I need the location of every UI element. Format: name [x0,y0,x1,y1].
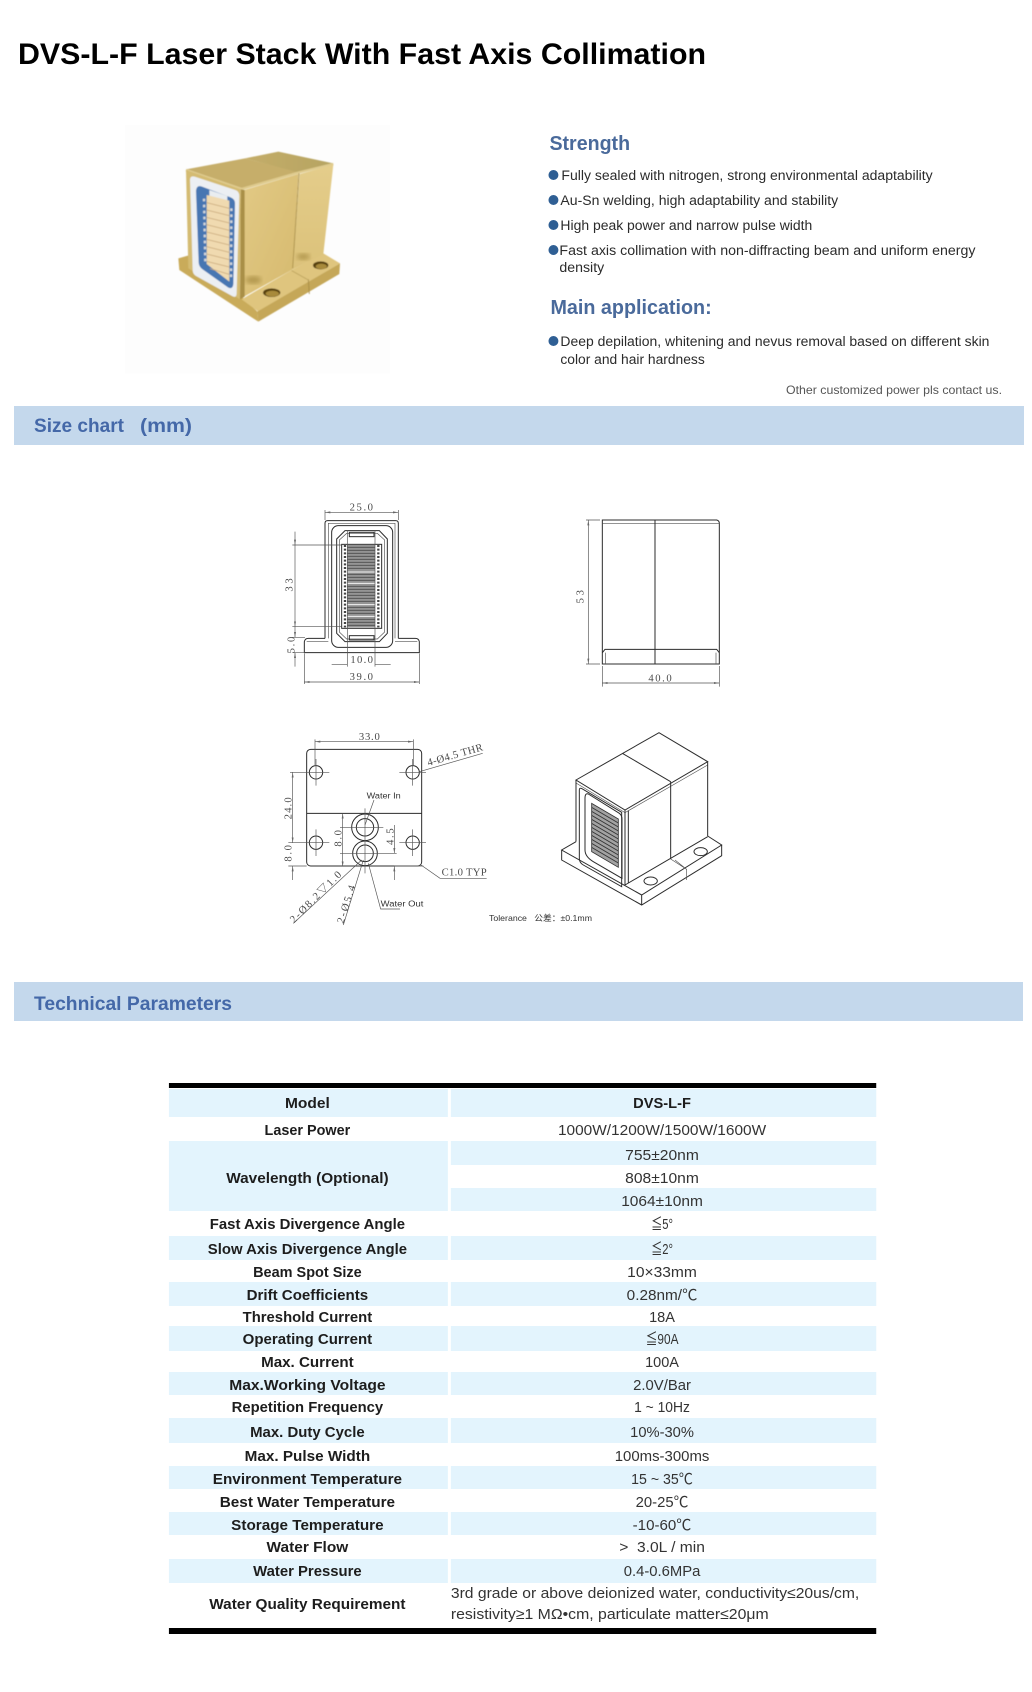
row: drift: Drift Coefficients [247,1287,368,1304]
row: water temperature: 20-25℃ [636,1494,688,1511]
row: water quality [209,1585,859,1623]
row: duty cycle [250,1424,694,1441]
row: water quality: 3rd grade or above deionized water, conductivity≤20us/cm, [451,1585,859,1602]
heading: main application: Main application: [550,297,712,319]
banner: size chart: Size chart [34,416,125,437]
panel: main application [548,297,989,367]
row: fast axis [210,1216,673,1233]
row: duty cycle: 10%-30% [630,1424,694,1441]
bullet list: strengths: Fully sealed with nitrogen, strong environmental adaptability [561,167,933,183]
row: slow axis [208,1241,673,1258]
row: wavelength: Wavelength (Optional) [226,1170,389,1187]
row: max current: 100A [645,1354,679,1371]
bullet list: strengths: Au-Sn welding, high adaptability and stability [560,192,838,208]
row: laser power: Laser Power [265,1122,350,1139]
row: laser power [265,1122,767,1139]
row: working voltage: Max.Working Voltage [229,1377,386,1394]
row: water flow: Water Flow [267,1539,349,1556]
dimension and water labels: Water Out [381,900,424,909]
bullet list: strengths: Fast axis collimation with non-diffracting beam and uniform energy [559,242,976,258]
chart: bottom view dimension drawing [284,732,487,925]
row: max current: Max. Current [261,1354,354,1371]
banner: size chart [14,406,1024,445]
dimension labels: 5.0 [287,637,298,653]
bullet: application text: Deep depilation, whitening and nevus removal based on different skin [560,333,989,349]
note: tolerance: Tolerance 公差：±0.1mm [489,913,592,923]
note: customised power: Other customized power pls contact us. [786,383,1002,397]
dimension and water labels: 24.0 [284,797,295,819]
bullet list: strengths [548,167,976,275]
row: beam spot [253,1264,697,1281]
row: threshold [243,1309,675,1326]
title: DVS-L-F Laser Stack With Fast Axis Collimation [18,38,706,71]
dimension and water labels: Water In [367,791,401,800]
dimension and water labels: 2-Ø8.2▽1.0 [288,870,344,925]
row: model [285,1095,691,1112]
row: slow axis: Slow Axis Divergence Angle [208,1241,407,1258]
row: water temperature: Best Water Temperature [220,1494,395,1511]
dimension and water labels: 4.5 [385,828,396,845]
row: water quality: resistivity≥1 MΩ•cm, particulate matter≤20μm [451,1606,769,1623]
banner: technical parameters [14,982,1023,1021]
dimension and water labels: 8.0 [284,845,295,862]
dimension labels [284,503,373,683]
table: technical parameters [169,1083,876,1634]
bullet: application text: color and hair hardness [560,351,705,367]
dimension labels: 39.0 [350,672,373,683]
row: pulse width: 100ms-300ms [615,1448,709,1465]
row: storage temperature: Storage Temperature [231,1517,384,1534]
row: water flow: > 3.0L / min [619,1539,705,1556]
bullet list: strengths: High peak power and narrow pulse width [560,217,812,233]
row: water temperature [220,1494,688,1511]
row: environment temperature: 15 ~ 35℃ [631,1471,693,1488]
row: wavelength: 808±10nm [625,1170,699,1187]
table row shading [169,1089,876,1583]
row: water quality: Water Quality Requirement [209,1596,406,1613]
row: repetition: Repetition Frequency [232,1399,384,1416]
dimension and water labels: 2-Ø5.4 [336,883,359,925]
row: fast axis: ≦5° [651,1216,673,1233]
row: drift: 0.28nm/℃ [627,1287,697,1304]
dimension and water labels [284,732,487,925]
dimension labels [576,590,672,684]
dimension labels: 10.0 [350,655,373,666]
dimension and water labels: C1.0 TYP [442,868,487,879]
row: threshold: Threshold Current [243,1309,372,1326]
bullet: application text [548,333,989,367]
row: pulse width: Max. Pulse Width [245,1448,370,1465]
row: operating [243,1331,678,1348]
row: wavelength: 755±20nm [625,1147,699,1164]
row: environment temperature [213,1471,693,1488]
row: repetition: 1 ~ 10Hz [634,1399,690,1416]
row: water pressure: Water Pressure [253,1563,362,1580]
row: beam spot: 10×33mm [627,1264,697,1281]
heading: strength: Strength [549,133,630,155]
banner: technical parameters: Technical Parameters [34,994,232,1015]
icon: gold laser stack product photo [125,125,390,373]
row: model: DVS-L-F [633,1095,691,1112]
row: fast axis: Fast Axis Divergence Angle [210,1216,405,1233]
row: wavelength: 1064±10nm [621,1193,703,1210]
row: beam spot: Beam Spot Size [253,1264,362,1281]
row: environment temperature: Environment Temperature [213,1471,402,1488]
row: model: Model [285,1095,330,1112]
dimension and water labels: 33.0 [359,732,380,743]
row: storage temperature [231,1517,691,1534]
panel: strength [548,133,976,275]
row: water pressure [253,1563,701,1580]
chart: side view dimension drawing [576,520,719,687]
row: threshold: 18A [649,1309,675,1326]
row: water flow [267,1539,705,1556]
row: slow axis: ≦2° [651,1241,673,1258]
chart: isometric view line drawing [562,733,722,905]
row: wavelength [226,1147,703,1210]
row: pulse width [245,1448,709,1465]
row: operating: ≦90A [646,1331,678,1348]
row: max current [261,1354,679,1371]
row: working voltage [229,1377,691,1394]
row: drift [247,1287,697,1304]
dimension labels: 40.0 [648,673,672,684]
dimension labels: 33 [284,578,295,592]
bullet list: strengths: density [559,259,604,275]
row: repetition [232,1399,690,1416]
row: water pressure: 0.4-0.6MPa [624,1563,701,1580]
row: storage temperature: -10-60℃ [633,1517,691,1534]
dimension and water labels: 8.0 [334,830,345,847]
row: working voltage: 2.0V/Bar [633,1377,691,1394]
banner: size chart: (mm) [140,416,192,437]
dimension labels: 25.0 [350,503,373,514]
dimension and water labels: 4-Ø4.5 THR [426,742,485,769]
dimension labels: 53 [576,590,587,603]
row: laser power: 1000W/1200W/1500W/1600W [558,1122,767,1139]
chart: front view dimension drawing [284,503,419,684]
row: duty cycle: Max. Duty Cycle [250,1424,365,1441]
row: operating: Operating Current [243,1331,372,1348]
